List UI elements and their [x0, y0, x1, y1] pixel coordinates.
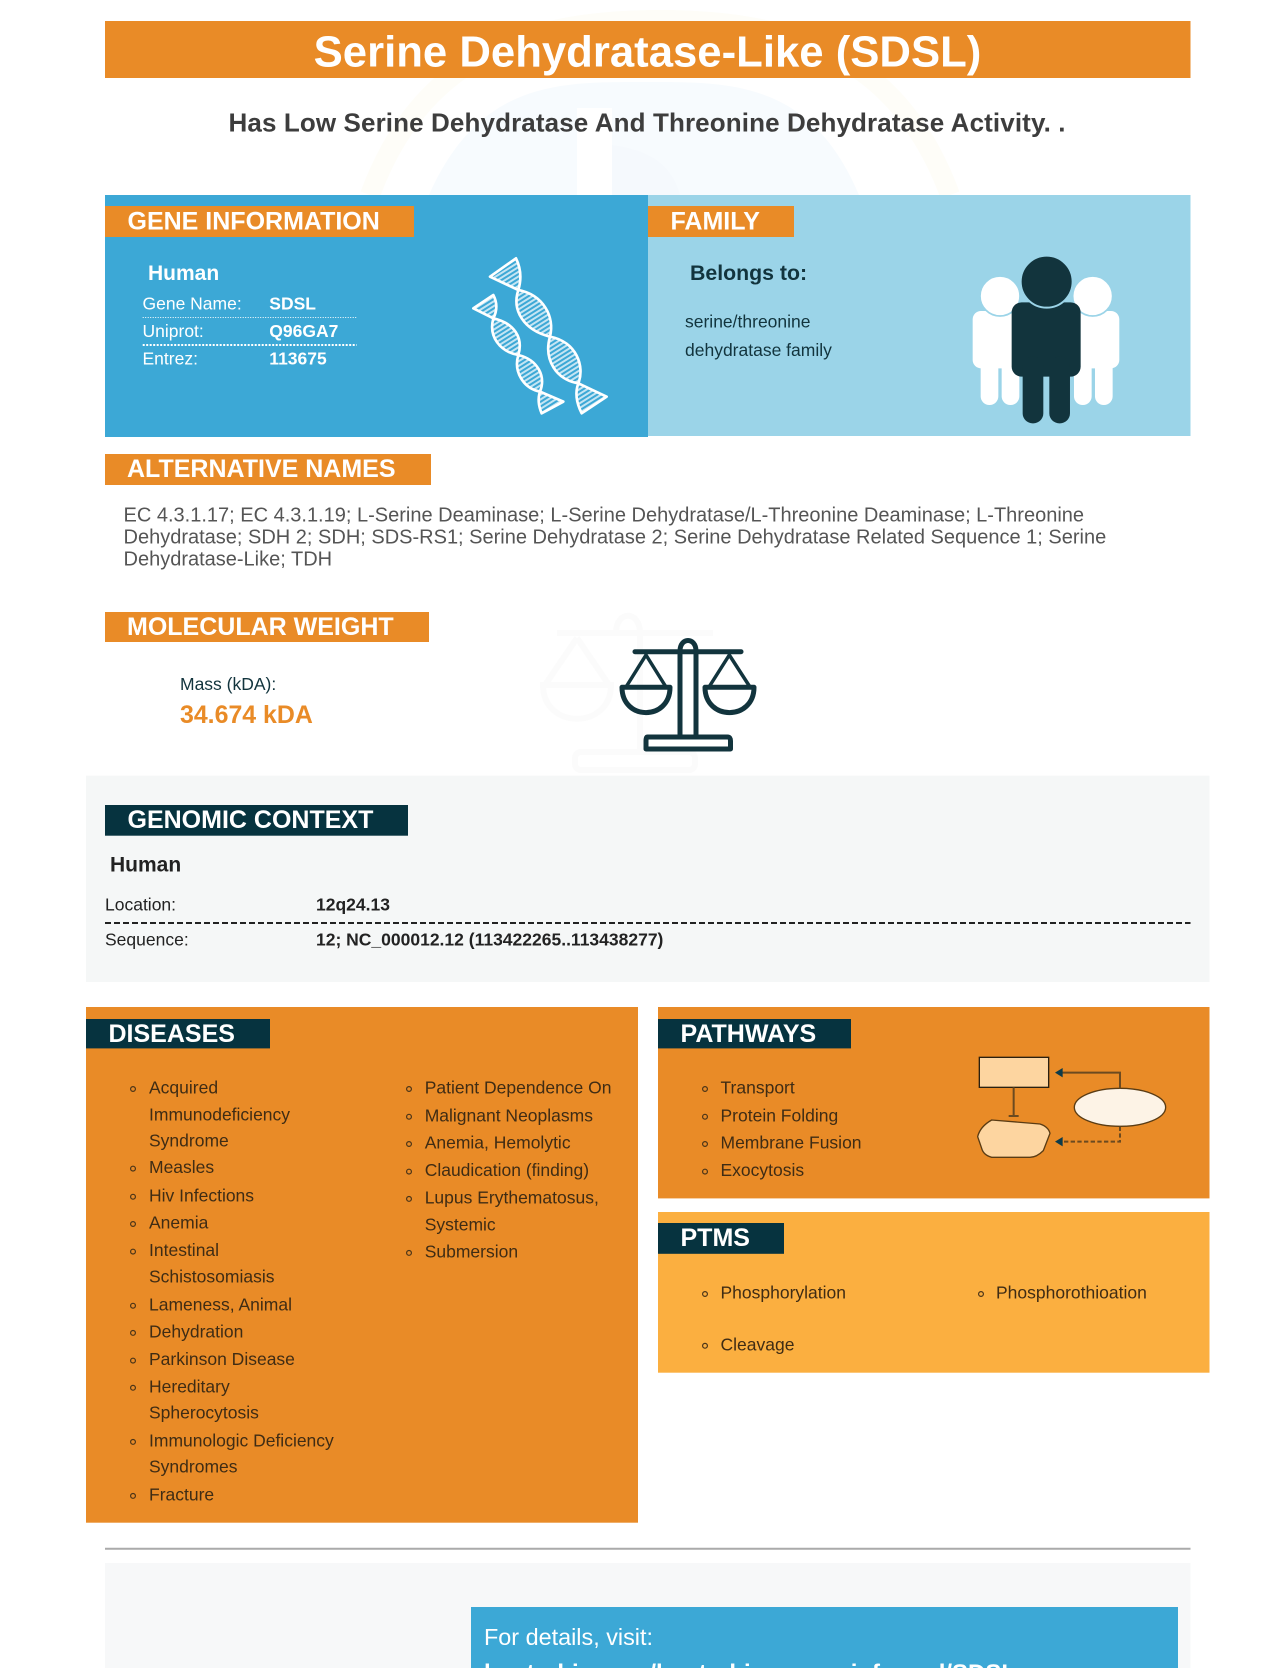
disease list: right column [407, 1078, 612, 1262]
pathway list: Membrane Fusion [720, 1133, 862, 1153]
gene details table: Gene Name: [142, 293, 242, 313]
disease list: left column: Syndromes [149, 1456, 238, 1476]
disease list: left column: Parkinson Disease [149, 1349, 295, 1369]
ptm list: Phosphorothioation [996, 1283, 1147, 1303]
disease list: left column: Acquired [149, 1078, 218, 1098]
heading: diseases [86, 1019, 270, 1048]
icon: faint scale watermark [543, 616, 713, 770]
disease list: left column: Dehydration [149, 1322, 243, 1342]
gene details table [142, 293, 357, 368]
sequence row: Sequence: [105, 930, 189, 950]
panel: footer [105, 1563, 1190, 1668]
family description: serine/threonine [685, 312, 810, 332]
callout: details link: For details, visit: [484, 1624, 653, 1650]
disease list: left column: Syndrome [149, 1130, 229, 1150]
heading: ptms [658, 1223, 784, 1254]
disease list: left column: Schistosomiasis [149, 1267, 275, 1287]
disease list: left column: Fracture [149, 1484, 214, 1504]
alternative names text: Dehydratase; SDH 2; SDH; SDS-RS1; Serine Dehydratase 2; Serine Dehydratase Related Sequence 1; Serine [124, 527, 1106, 549]
heading: genomic context: GENOMIC CONTEXT [128, 806, 373, 834]
disease list: right column: Patient Dependence On [425, 1078, 612, 1098]
disease list: right column: Anemia, Hemolytic [425, 1133, 571, 1153]
heading: alternative names: ALTERNATIVE NAMES [127, 455, 396, 483]
gene details table: 113675 [269, 348, 327, 368]
disease list: left column: Immunologic Deficiency [149, 1430, 334, 1450]
heading: molecular weight: MOLECULAR WEIGHT [127, 613, 394, 641]
location row: Location: [105, 895, 176, 915]
alternative names text: Dehydratase-Like; TDH [124, 549, 332, 571]
icon: pathway diagram [978, 1057, 1166, 1157]
pathway list: Exocytosis [720, 1160, 804, 1180]
gene details table: Entrez: [142, 348, 198, 368]
icon: dna helices [473, 258, 607, 413]
disease list: right column: Lupus Erythematosus, [425, 1188, 599, 1208]
disease list: right column: Claudication (finding) [425, 1160, 589, 1180]
location row [105, 895, 390, 915]
pathway list: Protein Folding [720, 1105, 838, 1125]
heading: family [648, 206, 794, 237]
sequence row: 12; NC_000012.12 (113422265..113438277) [316, 930, 663, 950]
heading: diseases: DISEASES [108, 1020, 235, 1048]
species label: Human [148, 262, 219, 285]
subtitle: Has Low Serine Dehydratase And Threonine Dehydratase Activity. . [228, 108, 1066, 138]
ptm list [703, 1283, 1147, 1354]
icon: people [973, 256, 1119, 423]
disease list: left column: Measles [149, 1157, 214, 1177]
panel: diseases [86, 1007, 638, 1523]
belongs to label: Belongs to: [690, 261, 807, 285]
panel: gene information [105, 195, 648, 437]
heading: gene information: GENE INFORMATION [128, 208, 380, 236]
disease list: right column: Submersion [425, 1242, 518, 1262]
panel: genomic context [86, 776, 1210, 982]
disease list: left column: Anemia [149, 1213, 209, 1233]
title banner: Serine Dehydratase-Like (SDSL) [314, 28, 981, 76]
disease list: left column: Hereditary [149, 1376, 230, 1396]
gene details table: Uniprot: [142, 321, 204, 341]
disease list: left column: Lameness, Animal [149, 1294, 292, 1314]
heading: ptms: PTMS [680, 1224, 750, 1252]
pathway list [703, 1078, 862, 1180]
icon: balance scale [622, 640, 754, 749]
panel: family [648, 195, 1190, 436]
species label: Human [110, 853, 181, 876]
alternative names text: EC 4.3.1.17; EC 4.3.1.19; L-Serine Deaminase; L-Serine Dehydratase/L-Threonine Deaminase; L-Threonine [124, 504, 1084, 526]
disease list: left column: Immunodeficiency [149, 1104, 290, 1124]
title banner [105, 21, 1190, 78]
sequence row [105, 930, 663, 950]
panel: pathways [658, 1007, 1210, 1198]
callout: details link [471, 1607, 1178, 1668]
ptm list: Phosphorylation [720, 1283, 846, 1303]
disease list: right column: Systemic [425, 1214, 496, 1234]
heading: pathways [658, 1019, 851, 1048]
watermark arch [370, 20, 950, 195]
gene details table: Q96GA7 [269, 321, 338, 341]
location row: 12q24.13 [316, 895, 390, 915]
heading: pathways: PATHWAYS [680, 1020, 816, 1048]
mass value: 34.674 kDA [180, 701, 313, 729]
family description [685, 312, 832, 360]
disease list: left column [131, 1078, 334, 1504]
panel: ptms [658, 1212, 1210, 1373]
mass label: Mass (kDA): [180, 674, 276, 694]
disease list: left column: Intestinal [149, 1240, 219, 1260]
pathway list: Transport [720, 1078, 795, 1098]
family description: dehydratase family [685, 340, 832, 360]
ptm list: Cleavage [720, 1334, 794, 1354]
disease list: left column: Spherocytosis [149, 1402, 259, 1422]
disease list: left column: Hiv Infections [149, 1185, 254, 1205]
disease list: right column: Malignant Neoplasms [425, 1105, 593, 1125]
gene details table: SDSL [269, 293, 316, 313]
alternative names text [124, 504, 1106, 571]
heading: family: FAMILY [670, 208, 760, 236]
